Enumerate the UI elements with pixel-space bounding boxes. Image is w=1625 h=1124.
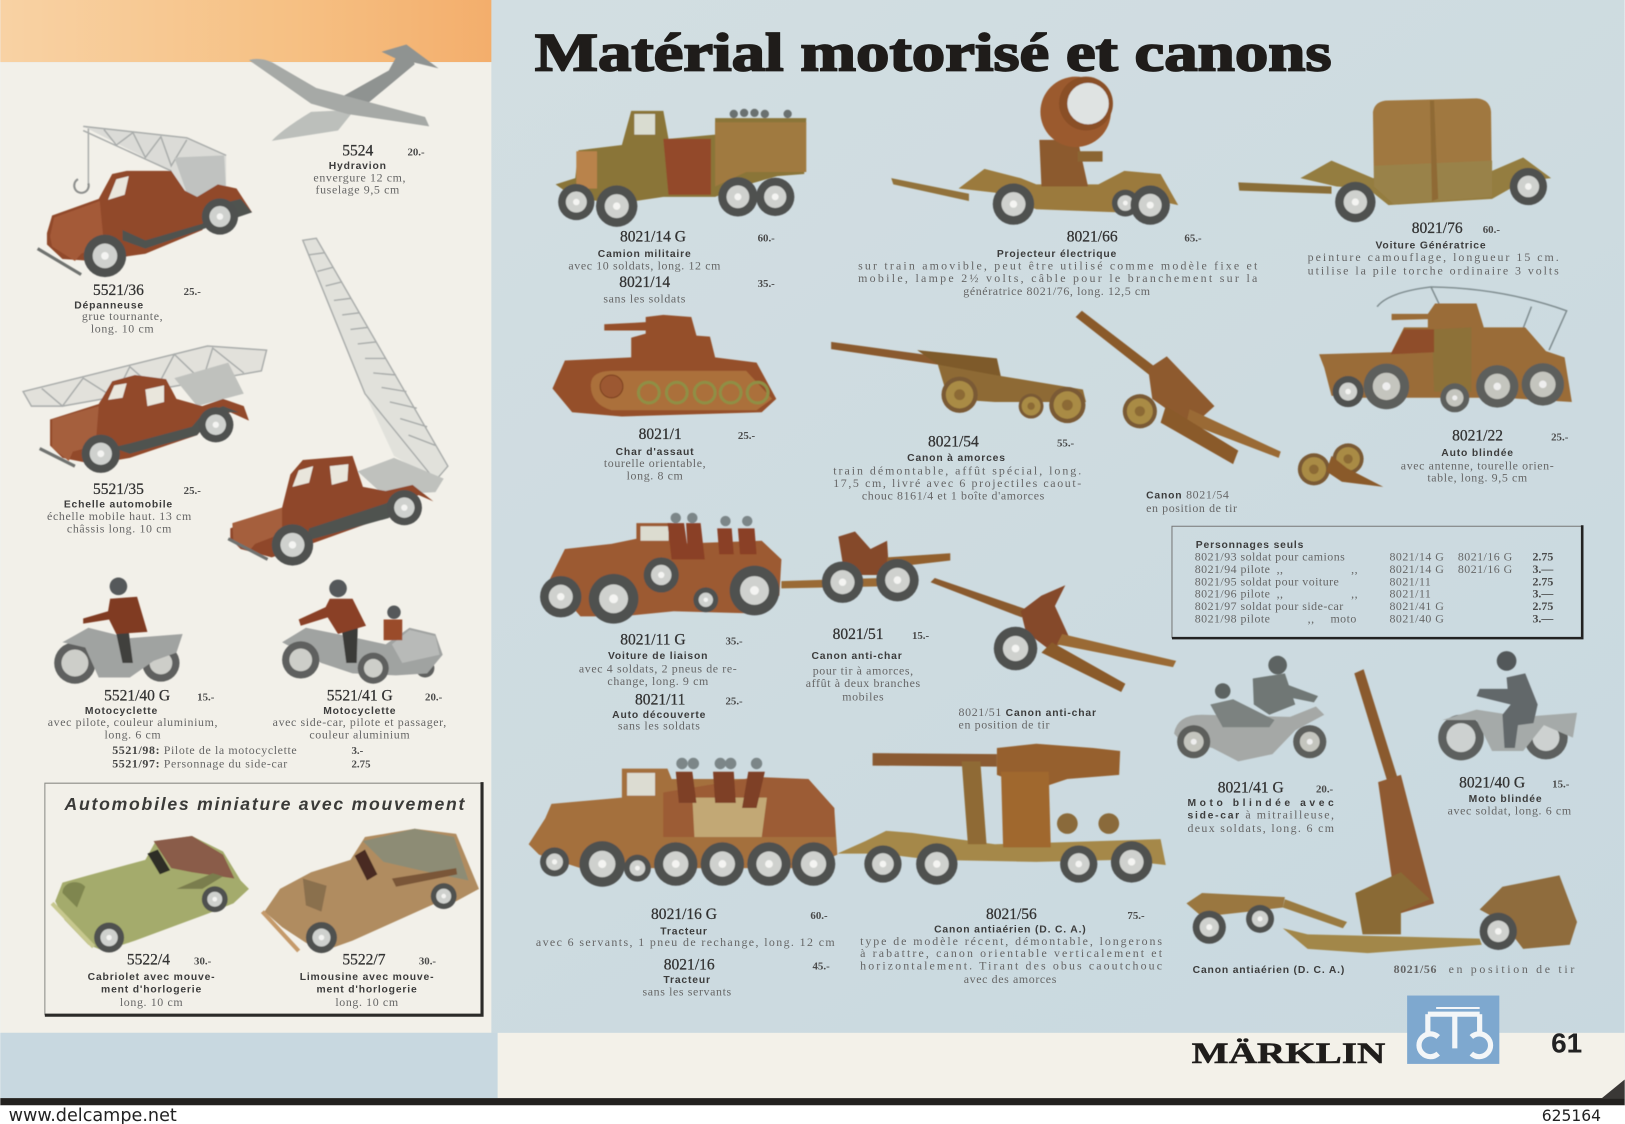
text: 5522/4: Cabriolet avec mouve-	[88, 972, 215, 983]
item: motorcycle with side-car 5521/41 G	[273, 580, 447, 742]
item: tank: long. 8 cm	[627, 469, 684, 483]
icon: motorcycle with rider	[54, 578, 183, 684]
item: anti-tank gun: pour tir à amorces,	[813, 663, 914, 677]
item: armoured car: 25.-	[1551, 431, 1569, 443]
panel: spare figures table: 8021/96 pilote	[1195, 587, 1270, 601]
item: anti-aircraft gun on trailer: 75.-	[1127, 910, 1145, 922]
text: 5522/7: 5522/7	[342, 951, 386, 968]
main title: Matérial motorisé et canons	[535, 22, 1332, 82]
panel: spare figures table: ,,	[1277, 562, 1283, 576]
item: tank: tourelle orientable,	[604, 456, 706, 470]
item: field gun: 17,5 cm, livré avec 6 projectiles caout-	[833, 476, 1082, 490]
panel: spare figures table: moto	[1330, 612, 1357, 626]
item: ladder truck 5521/35: 25.-	[184, 485, 201, 497]
item: generator trailer: 60.-	[1483, 224, 1500, 236]
item: half-track tractor: sans les servants	[643, 985, 732, 999]
panel: spare figures table: 8021/16 G	[1458, 549, 1513, 563]
item: generator trailer: Voiture Génératrice	[1375, 241, 1486, 252]
item: seaplane 5524: envergure 12 cm,	[313, 170, 406, 184]
item: searchlight trailer: Projecteur électrique	[997, 249, 1117, 260]
item: searchlight trailer: 8021/66	[1067, 228, 1118, 245]
item: anti-aircraft gun on trailer: Canon antiaérien (D. C. A.)	[934, 924, 1087, 935]
icon: seaplane	[249, 45, 439, 141]
item: ladder truck 5521/35: Echelle automobile	[64, 500, 173, 511]
item: motorcycle with side-car 5521/41 G: 20.-	[425, 691, 443, 703]
item: liaison car: 35.-	[725, 635, 743, 647]
item: field gun: chouc 8161/4 et 1 boîte d'amorces	[862, 488, 1045, 502]
item: tank: 8021/1	[639, 426, 682, 443]
text: 5522/7: ment d'horlogerie	[317, 984, 418, 995]
panel: spare figures table: 8021/93 soldat pour camions	[1195, 549, 1345, 563]
panel: clockwork miniature cars	[45, 782, 482, 1015]
item: armoured motorcycle: 8021/40 G	[1459, 774, 1525, 791]
item: anti-aircraft gun on trailer: type de modèle récent, démontable, longerons	[860, 934, 1163, 948]
spare figures list: 5521/97: Personnage du side-car	[112, 757, 288, 771]
item: liaison car: 8021/11 G	[620, 631, 686, 648]
item: anti-aircraft gun firing position: Canon antiaérien (D. C. A.)	[1193, 965, 1345, 976]
item: seaplane 5524	[249, 45, 439, 197]
item: breakdown truck 5521/36: long. 10 cm	[91, 322, 154, 336]
item: anti-tank gun: affût à deux branches	[806, 676, 921, 690]
item: half-track tractor: Tracteur	[660, 926, 708, 937]
item: generator trailer: peinture camouflage, longueur 15 cm.	[1308, 250, 1559, 264]
panel: left column toys	[23, 45, 482, 1015]
item: breakdown truck 5521/36: 5521/36	[93, 282, 144, 299]
icon: tank	[552, 315, 776, 416]
item: breakdown truck 5521/36	[38, 126, 252, 336]
item: armoured car: 8021/22	[1452, 427, 1503, 444]
item: armoured car	[1319, 287, 1572, 485]
item: ladder truck 5521/35: échelle mobile haut. 13 cm	[47, 509, 192, 523]
item: half-track tractor: 8021/16 G	[651, 906, 717, 923]
panel: spare figures table: 8021/40 G	[1390, 612, 1444, 626]
item: anti-tank gun firing position: en position de tir	[959, 717, 1050, 731]
icon: brown clockwork limousine	[262, 829, 479, 953]
item: motorcycle 5521/40 G: Motocyclette	[85, 706, 158, 717]
icon: liaison car with soldiers	[540, 513, 781, 624]
item: motorcycle with side-car 5521/41 G: couleur aluminium	[309, 728, 410, 742]
icon: field gun towed	[831, 342, 1086, 423]
item: motorcycle 5521/40 G: 5521/40 G	[104, 687, 170, 704]
item: motorcycle with side-car 5521/41 G: Motocyclette	[323, 706, 396, 717]
item: searchlight trailer: sur train amovible, peut être utilisé comme modèle fixe et	[858, 258, 1258, 272]
item: anti-tank gun: Canon anti-char	[811, 651, 903, 662]
item: military truck: 60.-	[758, 232, 775, 244]
item: anti-aircraft gun firing position: en position de tir	[1449, 962, 1575, 976]
icon: military motorcycle	[1438, 651, 1577, 760]
item: armoured car: avec antenne, tourelle orien-	[1401, 458, 1554, 472]
item: half-track tractor: 45.-	[812, 961, 830, 973]
icon: field gun firing position	[1076, 311, 1281, 464]
item: anti-tank gun: mobiles	[842, 689, 884, 703]
item: ladder truck 5521/35: châssis long. 10 cm	[67, 521, 172, 535]
item: armoured motorcycle with side-car: 20.-	[1316, 783, 1334, 795]
item: ladder truck 5521/35: 5521/35	[93, 481, 144, 498]
item: liaison car: Auto découverte	[612, 710, 706, 721]
panel: spare figures table: 8021/95 soldat pour voiture	[1195, 574, 1339, 588]
item: liaison car: Voiture de liaison	[608, 651, 708, 662]
item: armoured motorcycle with side-car	[1174, 656, 1335, 835]
item: motorcycle 5521/40 G: avec pilote, couleur aluminium,	[48, 715, 218, 729]
icon: armoured car	[1319, 287, 1572, 412]
spare figures list: 2.75	[352, 759, 371, 771]
item: armoured motorcycle	[1438, 651, 1577, 817]
item: seaplane 5524: Hydravion	[329, 161, 387, 172]
icon: military truck	[556, 109, 806, 227]
panel: spare figures table: 8021/14 G	[1390, 562, 1444, 576]
text: 5522/7	[300, 951, 436, 1009]
item: field gun in firing position: en position de tir	[1146, 501, 1238, 515]
panel: spare figures table: 8021/94 pilote	[1195, 562, 1270, 576]
panel: spare figures table: 3.—	[1532, 562, 1553, 576]
panel: spare figures table: ,,	[1277, 587, 1283, 601]
item: half-track tractor	[529, 758, 837, 999]
item: motorcycle with side-car 5521/41 G: 5521/41 G	[327, 687, 393, 704]
panel: spare figures table: 8021/14 G	[1390, 549, 1444, 563]
footer brand name: MÄRKLIN	[1192, 1037, 1386, 1070]
item: field gun in firing position: Canon 8021/54	[1146, 487, 1229, 501]
text: 5522/7: Limousine avec mouve-	[300, 972, 434, 983]
item: armoured motorcycle: 15.-	[1552, 778, 1570, 790]
item: breakdown truck 5521/36: Dépanneuse	[74, 301, 144, 312]
panel: spare figures table: 3.—	[1532, 612, 1553, 626]
spare figures list	[112, 743, 371, 771]
item: motorcycle 5521/40 G: long. 6 cm	[105, 728, 161, 742]
item: half-track tractor: avec 6 servants, 1 pneu de rechange, long. 12 cm	[536, 935, 835, 949]
item: liaison car: change, long. 9 cm	[607, 674, 709, 688]
panel: spare figures table: ,,	[1351, 562, 1358, 576]
text: 5522/7: long. 10 cm	[335, 995, 399, 1009]
item: armoured motorcycle with side-car: deux soldats, long. 6 cm	[1188, 821, 1335, 835]
icon: extended ladder fire truck	[228, 238, 448, 566]
item: military truck: Camion militaire	[598, 249, 692, 260]
item: armoured motorcycle: avec soldat, long. 6 cm	[1448, 803, 1572, 817]
icon: Märklin logo	[1407, 996, 1499, 1064]
item: military truck: sans les soldats	[603, 291, 686, 305]
text: 5522/4	[88, 951, 215, 1009]
item: anti-tank gun: 8021/51	[833, 626, 884, 643]
item: liaison car: avec 4 soldats, 2 pneus de re-	[579, 661, 737, 675]
item: field gun in firing position	[1076, 311, 1281, 515]
item: field gun: train démontable, affût spécial, long.	[833, 463, 1082, 477]
item: anti-aircraft gun on trailer: avec des amorces	[964, 972, 1057, 986]
text: 5522/7: 30.-	[419, 955, 436, 967]
icon: anti-aircraft gun on trailer	[837, 744, 1166, 885]
item: seaplane 5524: 5524	[342, 142, 373, 159]
spare figures list: 5521/98: Pilote de la motocyclette	[112, 743, 297, 757]
icon: military side-car	[1174, 656, 1326, 761]
panel: spare figures table: 2.75	[1532, 549, 1553, 563]
icon: breakdown truck with crane	[38, 126, 252, 277]
item: generator trailer	[1238, 98, 1559, 278]
item: generator trailer: 8021/76	[1412, 220, 1463, 237]
icon: gun limber	[1298, 443, 1383, 487]
item: anti-tank gun firing position	[931, 578, 1176, 731]
panel: spare figures table	[1172, 525, 1582, 638]
panel: motorised material and guns	[529, 77, 1582, 999]
item: armoured motorcycle: Moto blindée	[1469, 794, 1542, 805]
item: field gun: 8021/54	[928, 433, 979, 450]
item: half-track tractor: 8021/16	[664, 957, 715, 974]
item: liaison car: 8021/11	[635, 691, 685, 708]
text: 5522/4: 30.-	[194, 955, 212, 967]
item: motorcycle 5521/40 G: 15.-	[197, 691, 215, 703]
item: armoured car: Auto blindée	[1441, 448, 1514, 459]
icon: searchlight	[891, 77, 1178, 225]
item: field gun	[831, 342, 1086, 502]
item: half-track tractor: 60.-	[810, 910, 828, 922]
item: seaplane 5524: fuselage 9,5 cm	[316, 183, 400, 197]
item: breakdown truck 5521/36: 25.-	[184, 286, 201, 298]
item: military truck: 8021/14 G	[620, 228, 686, 245]
icon: ladder truck	[23, 346, 267, 473]
item: ladder truck 5521/35	[23, 346, 267, 535]
panel: spare figures table: 8021/11	[1390, 574, 1431, 588]
item: field gun: Canon à amorces	[907, 453, 1006, 464]
item: half-track tractor: Tracteur	[663, 975, 711, 986]
icon: anti-aircraft gun firing position	[1186, 669, 1577, 953]
panel: spare figures table: 8021/11	[1390, 587, 1431, 601]
item: breakdown truck 5521/36: grue tournante,	[82, 309, 163, 323]
box heading: Automobiles miniature avec mouvement	[64, 794, 466, 814]
item: anti-tank gun	[781, 531, 950, 703]
item: liaison car: 25.-	[725, 695, 743, 707]
item: searchlight trailer: 65.-	[1184, 232, 1202, 244]
icon: green clockwork cabriolet	[52, 836, 249, 953]
panel: spare figures table: 8021/97 soldat pour side-car	[1195, 599, 1344, 613]
text: 5522/4: ment d'horlogerie	[101, 984, 202, 995]
item: seaplane 5524: 20.-	[407, 146, 425, 158]
item: armoured motorcycle with side-car: 8021/41 G	[1218, 779, 1284, 796]
icon: half-track tractor with crew	[529, 758, 837, 887]
icon: motorcycle with side-car	[282, 580, 443, 684]
item: armoured motorcycle with side-car: Moto blindée avec	[1188, 798, 1335, 809]
panel: spare figures table: 2.75	[1532, 599, 1553, 613]
item: military truck	[556, 109, 806, 305]
item: liaison car: sans les soldats	[618, 718, 701, 732]
panel: spare figures table: 8021/98 pilote	[1195, 612, 1270, 626]
item: anti-aircraft gun on trailer: à rabattre, canon orientable verticalement et	[860, 946, 1163, 960]
panel: spare figures table: Personnages seuls	[1196, 540, 1304, 551]
item: searchlight trailer: mobile, lampe 2½ volts, câble pour le branchement sur la	[858, 271, 1258, 285]
item: armoured car: table, long. 9,5 cm	[1427, 471, 1528, 485]
page number: 61	[1551, 1028, 1582, 1059]
item: motorcycle with side-car 5521/41 G: avec side-car, pilote et passager,	[273, 715, 447, 729]
item: searchlight trailer: génératrice 8021/76, long. 12,5 cm	[963, 284, 1151, 298]
item: anti-aircraft gun firing position	[1186, 669, 1577, 976]
item: military truck: 8021/14	[619, 274, 670, 291]
item: tank: 25.-	[738, 430, 755, 442]
icon: anti-tank gun firing position	[931, 578, 1176, 692]
item: motorcycle 5521/40 G	[48, 578, 218, 742]
panel: spare figures table: 8021/41 G	[1390, 599, 1444, 613]
item: tank: Char d'assaut	[616, 447, 694, 458]
item: anti-aircraft gun on trailer: 8021/56	[986, 906, 1037, 923]
panel: spare figures table: 2.75	[1532, 574, 1553, 588]
item: anti-tank gun: 15.-	[912, 630, 930, 642]
icon: towed anti-tank gun	[781, 531, 950, 603]
item: anti-aircraft gun on trailer: horizontalement. Tirant des obus caoutchouc	[860, 959, 1163, 973]
item: tank	[552, 315, 776, 483]
panel: spare figures table: ,,	[1308, 612, 1315, 626]
item: anti-aircraft gun on trailer	[837, 744, 1166, 986]
text: 5522/4: 5522/4	[127, 951, 170, 968]
panel: spare figures table: 8021/16 G	[1458, 562, 1513, 576]
item: anti-aircraft gun firing position: 8021/56	[1394, 962, 1437, 976]
box frame	[45, 783, 482, 1015]
item: searchlight trailer	[858, 77, 1258, 298]
item: liaison car	[540, 513, 781, 732]
item: generator trailer: utilise la pile torche ordinaire 3 volts	[1308, 264, 1559, 278]
panel: spare figures table: ,,	[1351, 587, 1358, 601]
icon: generator trailer	[1238, 98, 1551, 222]
panel: spare figures table: 3.—	[1532, 587, 1553, 601]
item: military truck: avec 10 soldats, long. 12 cm	[568, 258, 721, 272]
item: field gun: 55.-	[1057, 437, 1075, 449]
item: armoured motorcycle with side-car: side-car à mitrailleuse,	[1188, 807, 1335, 821]
text: 5522/4: long. 10 cm	[120, 995, 183, 1009]
item: military truck: 35.-	[758, 278, 775, 290]
spare figures list: 3.-	[352, 745, 364, 757]
item: anti-tank gun firing position: 8021/51 Canon anti-char	[959, 705, 1097, 719]
